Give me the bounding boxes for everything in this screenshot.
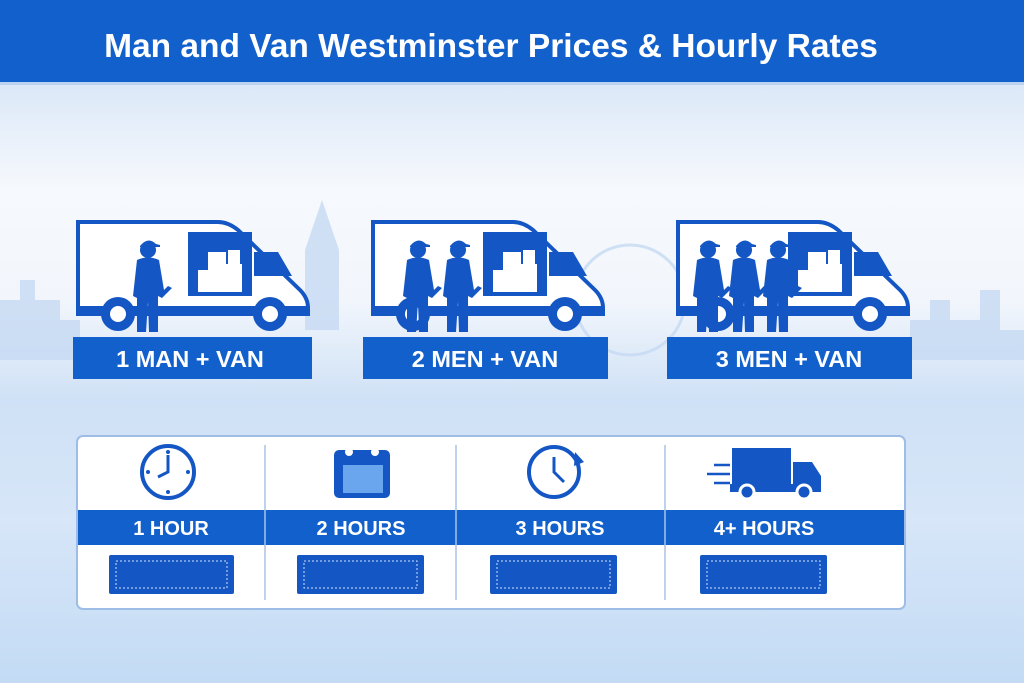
rates table: 3 HOURS (516, 518, 604, 540)
icon: truck (707, 448, 821, 499)
rates table: 1 HOUR (133, 518, 209, 540)
skyline (0, 200, 1024, 360)
rates table (77, 436, 905, 609)
header (0, 0, 1024, 85)
header: Man and Van Westminster Prices & Hourly Rates (104, 28, 878, 65)
van: 2 men (363, 222, 608, 379)
icon: clock arrow (529, 447, 584, 497)
van: 1 man: 1 MAN + VAN (116, 346, 264, 372)
icon: clock (142, 446, 194, 498)
van: 3 men (667, 222, 912, 379)
icon: calendar (334, 448, 390, 498)
van: 2 men: 2 MEN + VAN (412, 346, 558, 372)
van: 3 men: 3 MEN + VAN (716, 346, 862, 372)
price tickets (109, 555, 827, 594)
rates table: 2 HOURS (317, 518, 405, 540)
van: 1 man (73, 222, 312, 379)
rates table: 4+ HOURS (714, 518, 814, 540)
